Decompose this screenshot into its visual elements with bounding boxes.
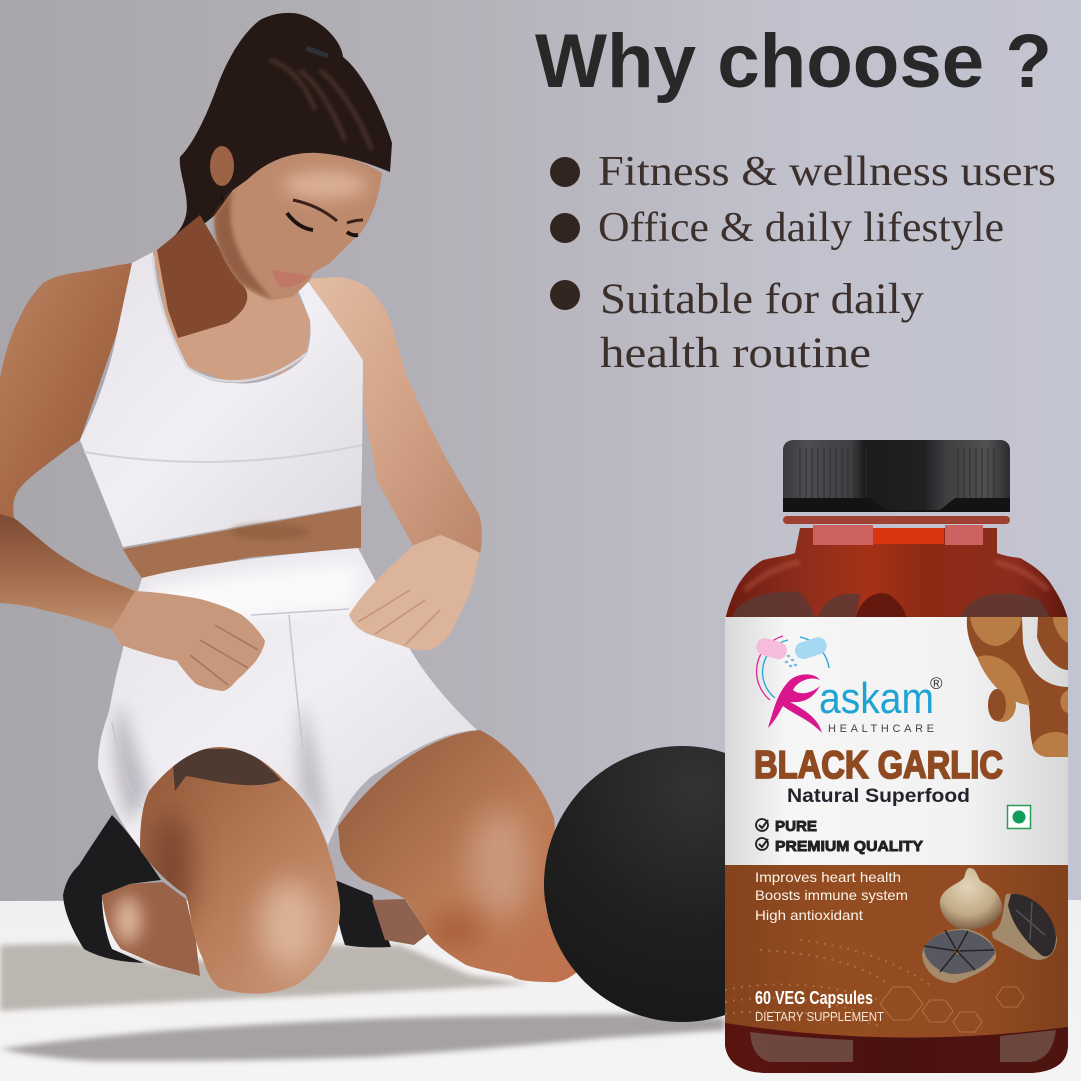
cap xyxy=(783,440,1010,512)
neck shadow xyxy=(157,215,247,338)
veg mark xyxy=(1008,806,1030,828)
neck side highlights xyxy=(813,525,983,545)
benefit lines on label: Improves heart health xyxy=(755,869,901,885)
bottle base xyxy=(725,1023,1068,1073)
wordmark: askam xyxy=(819,674,934,723)
studio floor xyxy=(0,900,1081,1081)
neck bright centre xyxy=(873,528,944,544)
subtitle: Natural Superfood xyxy=(787,786,970,807)
benefit: daily routine xyxy=(550,276,925,377)
shoulder arc highlight xyxy=(745,562,1048,590)
neck ring xyxy=(783,516,1010,524)
shorts xyxy=(98,548,477,848)
ponytail and hair xyxy=(157,13,392,250)
right thigh xyxy=(338,730,576,982)
thigh shadow xyxy=(148,810,192,930)
shorts seams xyxy=(112,609,349,807)
hex pattern xyxy=(880,987,1024,1032)
supplement bottle xyxy=(725,440,1068,1073)
benefit lines on label xyxy=(755,869,908,923)
dietary supplement: DIETARY SUPPLEMENT xyxy=(755,1010,884,1024)
decorative oval xyxy=(988,688,1016,722)
knee shadow xyxy=(427,912,483,948)
bottle glass xyxy=(725,528,1068,1073)
eyelashes xyxy=(287,213,358,235)
bra band seam xyxy=(84,445,362,462)
waistband shadow xyxy=(152,568,354,618)
claim: pure xyxy=(756,818,817,835)
icon: garlic slice xyxy=(922,929,996,983)
chest skin xyxy=(153,240,310,383)
hand on shorts, viewer left xyxy=(112,591,265,691)
powder dots xyxy=(786,656,796,666)
claim: premium quality: PREMIUM QUALITY xyxy=(775,838,923,855)
label brown panel xyxy=(725,865,1068,1055)
dotted texture xyxy=(725,940,930,1026)
midriff xyxy=(123,506,361,578)
hand on shorts, viewer right xyxy=(349,535,480,650)
label xyxy=(725,617,1068,1055)
medicine ball xyxy=(544,746,820,1022)
decorative tan lower xyxy=(977,655,1030,705)
title: Why choose ? xyxy=(535,19,1052,104)
ear xyxy=(210,146,234,208)
icon: garlic half xyxy=(992,894,1057,960)
benefit: office: Office & daily lifestyle xyxy=(598,205,1004,251)
woman athlete xyxy=(0,12,725,1022)
decorative blob main xyxy=(967,617,1068,757)
left calf xyxy=(102,882,200,976)
face xyxy=(215,153,382,300)
left thigh xyxy=(140,747,340,994)
R mark xyxy=(768,674,822,733)
decorative right tan xyxy=(1033,690,1068,757)
benefit: daily routine: health routine xyxy=(600,330,871,377)
tagline: HEALTHCARE xyxy=(828,723,934,735)
viewer-left forearm xyxy=(0,514,135,640)
product name: BLACK GARLIC xyxy=(754,744,1003,787)
thigh highlight xyxy=(470,810,530,920)
red capsule xyxy=(856,593,906,617)
decorative top right tan xyxy=(1053,617,1068,643)
icon: garlic bulb xyxy=(940,868,1002,930)
capsule reflections xyxy=(732,592,1050,617)
lips xyxy=(272,270,310,288)
hair tie xyxy=(306,48,328,56)
left shoe xyxy=(63,815,161,963)
shorts shading xyxy=(114,700,328,845)
benefit: fitness: Fitness & wellness users xyxy=(598,149,1056,195)
benefit lines on label: High antioxidant xyxy=(755,907,863,923)
brand logo xyxy=(754,635,943,735)
benefit: daily routine: Suitable for daily xyxy=(600,276,925,323)
forehead highlight xyxy=(283,171,367,199)
floor shadows xyxy=(0,943,725,1061)
neckline trim xyxy=(153,256,307,381)
logo ring xyxy=(757,636,829,700)
decorative top right xyxy=(1037,617,1068,670)
decorative tan circle xyxy=(970,617,1022,646)
hair highlights xyxy=(270,60,372,150)
tattoo xyxy=(173,749,281,791)
bottle base reflection xyxy=(750,1030,1056,1062)
cap ribs xyxy=(800,448,994,498)
capsule blue xyxy=(793,635,829,661)
benefit lines on label: Boosts immune system xyxy=(755,887,908,903)
capsule count: 60 VEG Capsules xyxy=(755,988,873,1008)
knee highlight xyxy=(260,880,320,970)
midriff shading xyxy=(230,524,310,540)
viewer-left upper arm xyxy=(0,263,132,520)
brow xyxy=(293,200,363,223)
right shoe xyxy=(335,880,391,947)
right ankle xyxy=(372,899,428,945)
sports bra xyxy=(80,252,363,547)
claim: pure: PURE xyxy=(775,818,817,835)
capsule pink xyxy=(754,636,789,661)
viewer-right arm xyxy=(307,277,482,576)
cap base xyxy=(783,498,1010,512)
cheek shadow xyxy=(215,190,273,300)
registered mark: ® xyxy=(930,674,943,693)
